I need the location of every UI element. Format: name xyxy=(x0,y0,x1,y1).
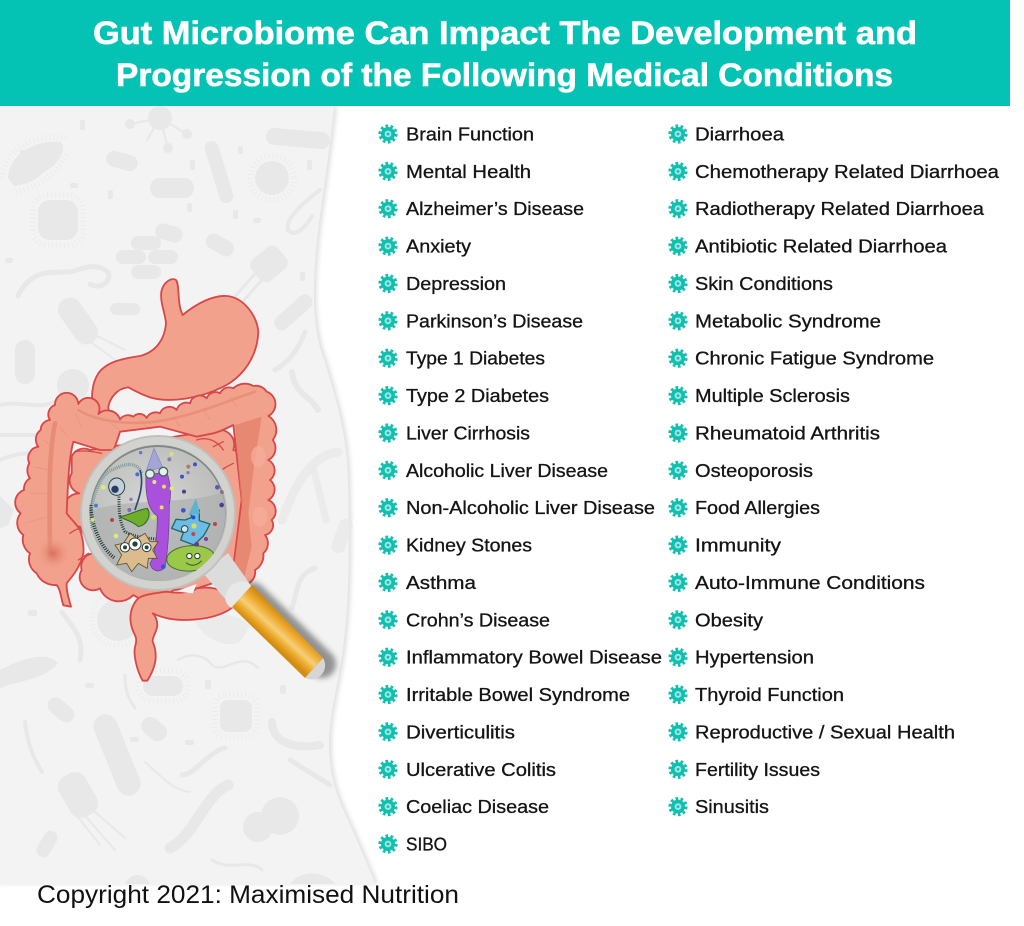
condition list: left column xyxy=(380,124,662,854)
item: Coeliac Disease xyxy=(406,797,549,817)
item: Non-Alcoholic Liver Disease xyxy=(406,498,655,518)
item: Type 1 Diabetes xyxy=(406,349,545,369)
title: Gut Microbiome Can Impact The Development and xyxy=(93,15,917,51)
item: Skin Conditions xyxy=(695,274,833,294)
item xyxy=(670,797,769,817)
item: Crohn’s Disease xyxy=(406,610,550,630)
item: Auto-Immune Conditions xyxy=(695,573,925,593)
item: Thyroid Function xyxy=(695,685,844,705)
item xyxy=(670,124,785,144)
item: Food Allergies xyxy=(695,498,820,518)
item: Kidney Stones xyxy=(406,536,532,556)
item: Osteoporosis xyxy=(695,461,813,481)
item: Hypertension xyxy=(695,648,814,668)
item: Depression xyxy=(406,274,506,294)
item: Irritable Bowel Syndrome xyxy=(406,685,630,705)
item xyxy=(670,610,763,630)
item: Fertility Issues xyxy=(695,760,820,780)
item: Alcoholic Liver Disease xyxy=(406,461,608,481)
lens rim xyxy=(80,435,236,591)
copyright note: Copyright 2021: Maximised Nutrition xyxy=(37,881,459,909)
microbe: green xyxy=(166,544,215,573)
item: Diverticulitis xyxy=(406,722,515,742)
microbe: flagellum xyxy=(90,465,160,558)
item: Liver Cirrhosis xyxy=(406,424,530,444)
item: Chemotherapy Related Diarrhoea xyxy=(695,162,1000,182)
stomach xyxy=(92,279,258,417)
microbe: purple xyxy=(146,448,171,571)
gap between loops xyxy=(176,584,197,593)
left background panel xyxy=(0,106,378,884)
item: Mental Health xyxy=(406,162,531,182)
item: Radiotherapy Related Diarrhoea xyxy=(695,199,985,219)
item xyxy=(380,834,447,854)
microbe: spiky tan xyxy=(115,533,158,572)
item: Diarrhoea xyxy=(695,124,785,144)
rectum xyxy=(130,588,233,681)
item: Inflammatory Bowel Disease xyxy=(406,648,662,668)
header banner xyxy=(0,0,1010,106)
item: Asthma xyxy=(406,573,477,593)
condition list: right column xyxy=(670,124,1000,817)
item: Sinusitis xyxy=(695,797,769,817)
microbe background pattern xyxy=(0,106,355,884)
item: Chronic Fatigue Syndrome xyxy=(695,349,934,369)
item: Rheumatoid Arthritis xyxy=(695,424,880,444)
colon xyxy=(15,384,276,607)
item: Brain Function xyxy=(406,124,534,144)
item: SIBO xyxy=(406,834,447,854)
item xyxy=(670,536,781,556)
colon folds xyxy=(50,423,55,553)
item: Metabolic Syndrome xyxy=(695,311,881,331)
item: Parkinson’s Disease xyxy=(406,311,583,331)
magnifying glass xyxy=(80,435,325,679)
item: Antibiotic Related Diarrhoea xyxy=(695,237,948,257)
microbes in lens xyxy=(90,448,224,573)
small intestine xyxy=(63,430,256,601)
item: Immunity xyxy=(695,536,781,556)
item: Alzheimer’s Disease xyxy=(406,199,584,219)
lens highlight rim xyxy=(86,440,230,586)
item xyxy=(380,573,477,593)
item: Obesity xyxy=(695,610,763,630)
floating particles xyxy=(91,451,224,547)
item: Ulcerative Colitis xyxy=(406,760,556,780)
item: Anxiety xyxy=(406,237,471,257)
item: Multiple Sclerosis xyxy=(695,386,850,406)
microbe: blue star xyxy=(172,498,210,545)
title xyxy=(93,15,917,93)
handle xyxy=(203,553,325,679)
item: Reproductive / Sexual Health xyxy=(695,722,955,742)
item: Type 2 Diabetes xyxy=(406,386,549,406)
gut illustration xyxy=(15,279,325,681)
item xyxy=(380,237,471,257)
title: Progression of the Following Medical Conditions xyxy=(116,57,893,93)
